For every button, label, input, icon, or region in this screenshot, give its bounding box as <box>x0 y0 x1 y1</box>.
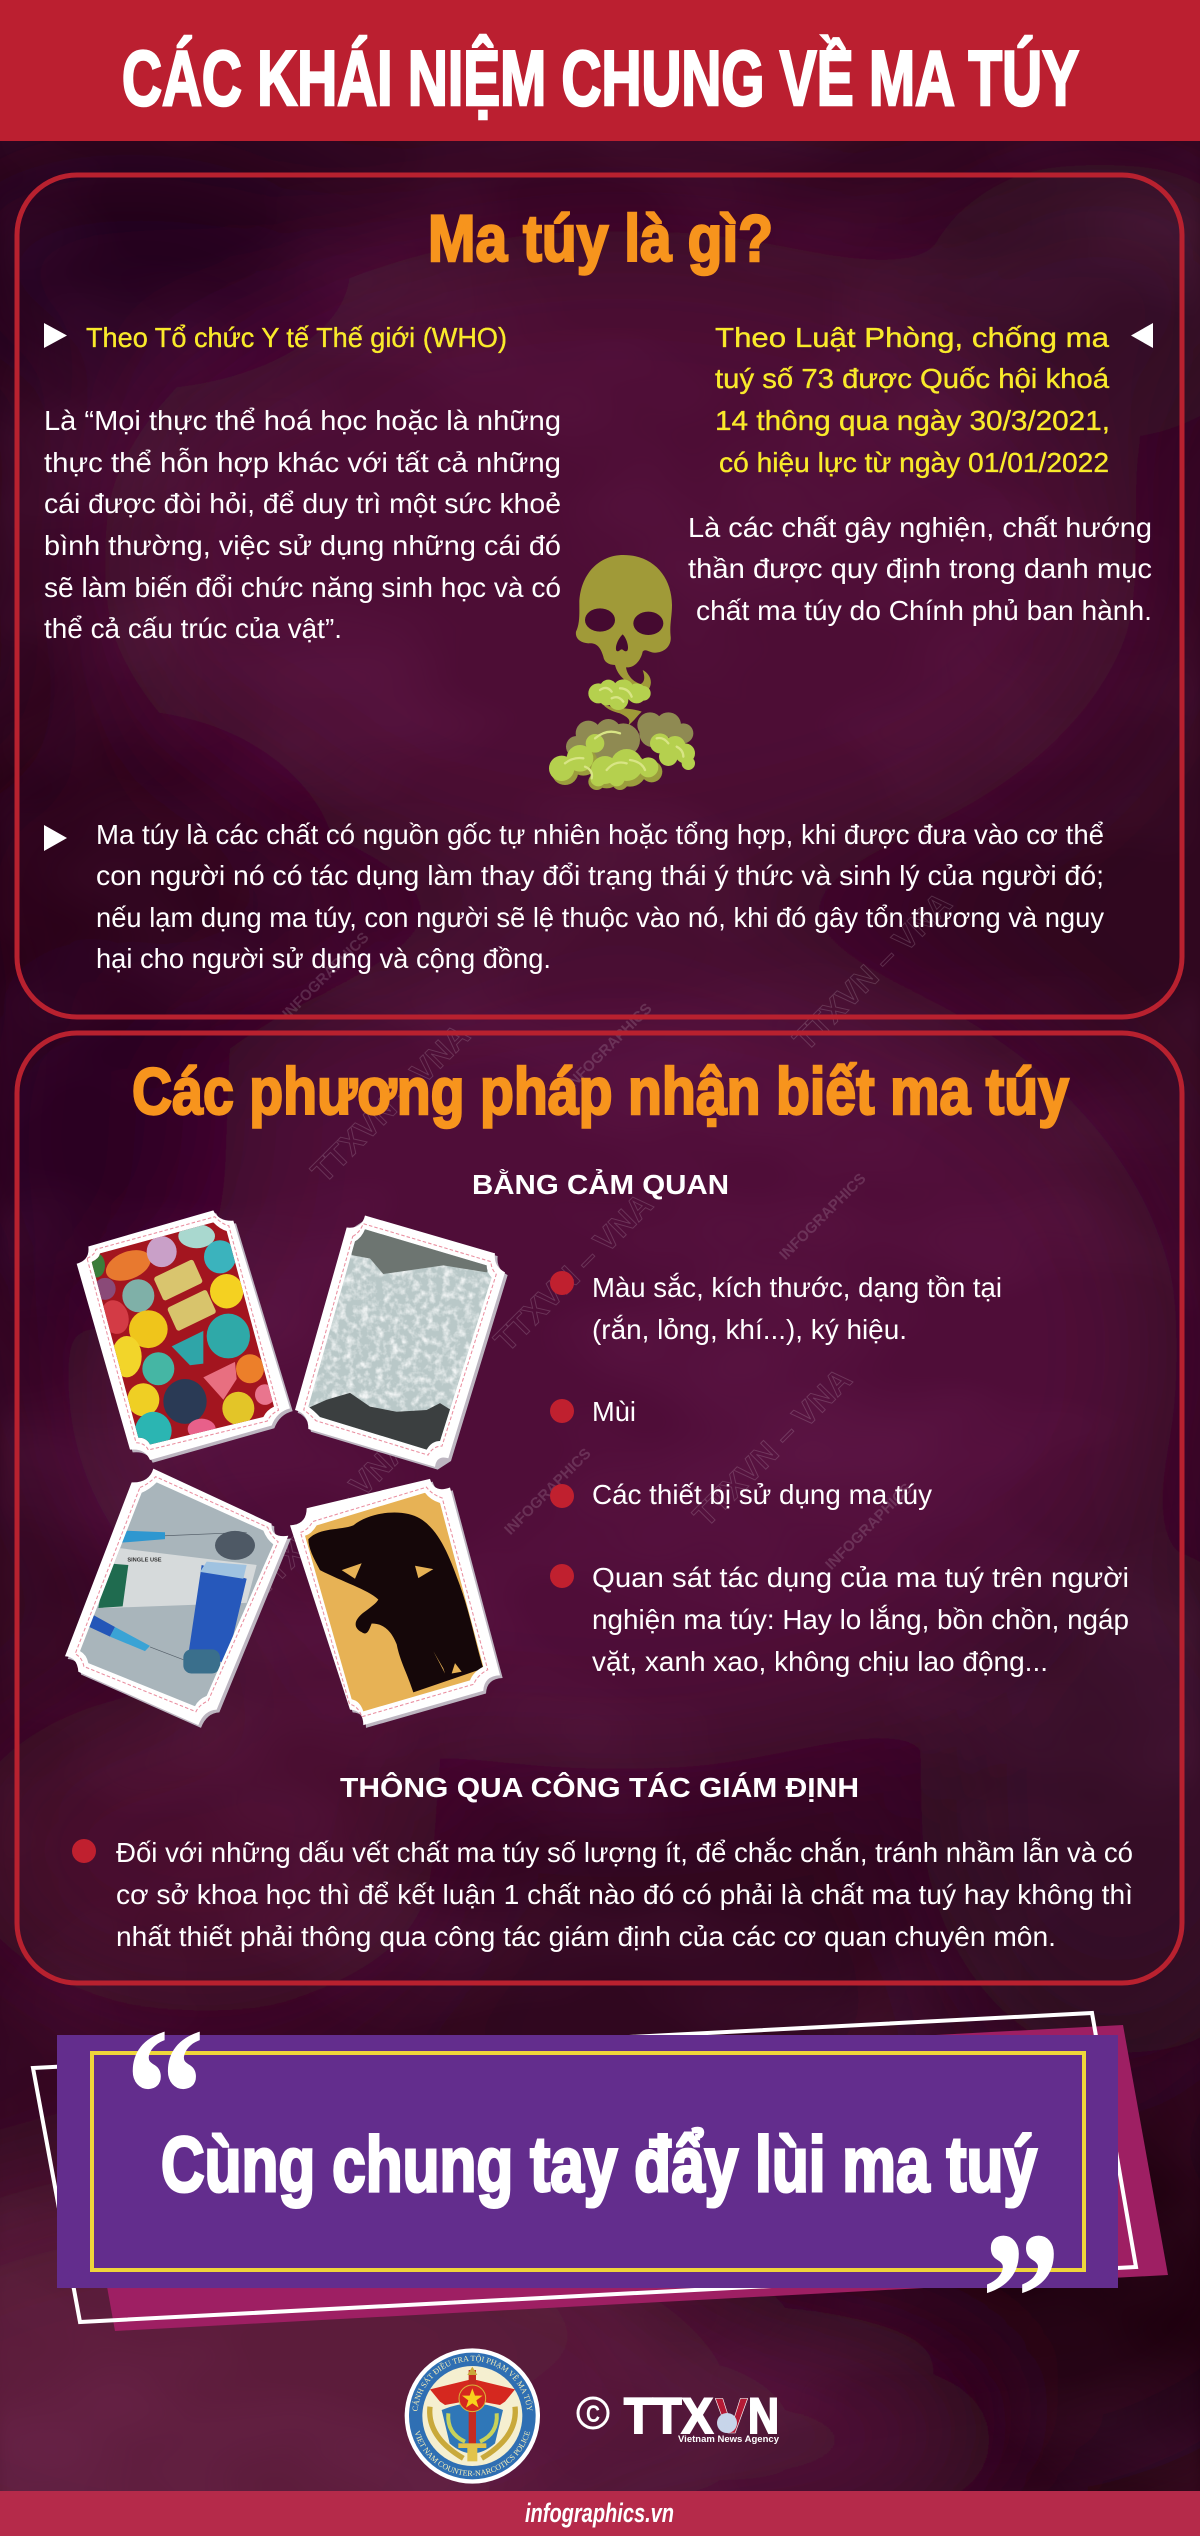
watermarks: TTXVN – VNA <box>304 1017 476 1189</box>
subheading: law: tuý số 73 được Quốc hội khoá <box>715 363 1109 394</box>
photos <box>65 1210 508 1728</box>
logo: TTXVN <box>578 2388 780 2445</box>
text block: general definition: con người nó có tác dụng làm thay đổi trạng thái ý thức và sinh lý của người đó; <box>96 860 1104 891</box>
watermarks: INFOGRAPHICS <box>562 1000 655 1093</box>
text block: law definition <box>688 512 1152 626</box>
closing quote mark: ” <box>981 2194 1061 2404</box>
bullet list: cảm quan: Màu sắc, kích thước, dạng tồn tại <box>592 1272 1002 1303</box>
text block: WHO definition: bình thường, việc sử dụng những cái đó <box>44 530 561 561</box>
subheading: bằng cảm quan: BẰNG CẢM QUAN <box>472 1168 729 1200</box>
logo: TTXVN: N <box>748 2388 779 2444</box>
panel: ma túy là gì <box>17 175 1182 1017</box>
photo: silhouette <box>290 1479 503 1728</box>
panel: phương pháp nhận biết <box>17 1033 1182 1983</box>
bullet list: cảm quan: (rắn, lỏng, khí...), ký hiệu. <box>592 1314 907 1345</box>
watermarks: INFOGRAPHICS <box>279 929 372 1022</box>
subheading: law: Theo Luật Phòng, chống ma <box>715 322 1109 353</box>
bullet list: cảm quan: Các thiết bị sử dụng ma túy <box>592 1479 932 1510</box>
arrow: WHO <box>44 323 67 348</box>
bullet list: cảm quan: Mùi <box>592 1396 636 1427</box>
text block: WHO definition: sẽ làm biến đổi chức năng sinh học và có <box>44 572 561 603</box>
text block: giám định: nhất thiết phải thông qua công tác giám định của các cơ quan chuyên môn. <box>116 1921 1056 1952</box>
watermarks: INFOGRAPHICS <box>776 1170 869 1263</box>
footer band <box>0 2491 1200 2536</box>
copyright symbol: C <box>586 2401 600 2428</box>
copyright symbol <box>578 2398 608 2428</box>
logo: TTXVN: TTX <box>624 2388 713 2444</box>
watermarks: INFOGRAPHICS <box>822 1480 915 1573</box>
watermarks: TTXVN – VNA <box>786 885 958 1057</box>
text block: law definition: chất ma túy do Chính phủ ban hành. <box>696 595 1152 626</box>
subheading: law: có hiệu lực từ ngày 01/01/2022 <box>719 447 1109 478</box>
photo: syringe and vial <box>65 1469 291 1728</box>
watermarks: TTXVN – VNA <box>243 1430 415 1602</box>
text block: general definition: nếu lạm dụng ma túy, con người sẽ lệ thuộc vào nó, khi đó gây tổn thương và nguy <box>96 902 1104 933</box>
header band <box>0 0 1200 141</box>
logo: TTXVN: V <box>715 2388 749 2444</box>
text block: giám định: cơ sở khoa học thì để kết luận 1 chất nào đó có phải là chất ma tuý hay không thì <box>116 1879 1133 1910</box>
emblem: counter-narcotics police: CẢNH SÁT ĐIỀU TRA TỘI PHẠM VỀ MA TÚY <box>412 2354 533 2411</box>
opening quote mark: “ <box>125 1990 205 2200</box>
emblem: counter-narcotics police: VIET NAM COUNTER-NARCOTICS POLICE <box>415 2430 530 2476</box>
text block: WHO definition: cái được đòi hỏi, để duy trì một sức khoẻ <box>44 488 561 519</box>
callout: slogan <box>33 1990 1168 2404</box>
bullet list: cảm quan: Quan sát tác dụng của ma tuý trên người <box>592 1562 1129 1593</box>
subheading: law <box>715 322 1110 478</box>
photo: crystals <box>293 1215 508 1470</box>
icon: skull and smoke <box>549 555 695 790</box>
watermarks: INFOGRAPHICS <box>501 1445 594 1538</box>
text block: WHO definition: Là “Mọi thực thể hoá học hoặc là những <box>44 405 561 436</box>
subheading: giám định: THÔNG QUA CÔNG TÁC GIÁM ĐỊNH <box>340 1771 859 1803</box>
text block: general definition: Ma túy là các chất có nguồn gốc tự nhiên hoặc tổng hợp, khi được đưa vào cơ thể <box>96 819 1104 850</box>
text block: law definition: thần được quy định trong danh mục <box>688 553 1152 584</box>
text block: giám định <box>72 1837 1133 1952</box>
photo: syringe and vial: SINGLE USE <box>127 1558 162 1564</box>
bullet list: cảm quan <box>550 1271 1129 1677</box>
watermarks <box>243 885 958 1602</box>
arrow: law <box>1131 323 1153 348</box>
heading: ma túy là gì: Ma túy là gì? <box>428 201 773 275</box>
photo: pills <box>77 1210 293 1463</box>
logo: TTXVN: Vietnam News Agency <box>678 2434 780 2445</box>
emblem: counter-narcotics police <box>404 2348 540 2484</box>
text block: law definition: Là các chất gây nghiện, chất hướng <box>688 512 1152 543</box>
text block: WHO definition: thực thể hỗn hợp khác với tất cả những <box>44 447 561 478</box>
bullet list: cảm quan: nghiện ma túy: Hay lo lắng, bồn chồn, ngáp <box>592 1604 1129 1635</box>
website: infographics.vn <box>525 2498 674 2528</box>
bullet list: cảm quan: vặt, xanh xao, không chịu lao động... <box>592 1646 1048 1677</box>
text block: WHO definition: thể cả cấu trúc của vật”. <box>44 613 342 644</box>
subheading: WHO: Theo Tổ chức Y tế Thế giới (WHO) <box>86 322 507 353</box>
text block: general definition <box>96 819 1104 974</box>
watermarks: TTXVN – VNA <box>686 1361 858 1533</box>
subheading: law: 14 thông qua ngày 30/3/2021, <box>715 405 1110 436</box>
text block: giám định: Đối với những dấu vết chất ma túy số lượng ít, để chắc chắn, tránh nhầm lẫn và có <box>116 1837 1133 1868</box>
watermarks: TTXVN – VNA <box>487 1186 659 1358</box>
text block: general definition: hại cho người sử dụng và cộng đồng. <box>96 943 551 974</box>
text block: WHO definition <box>44 405 561 644</box>
arrow: general definition <box>44 825 67 851</box>
